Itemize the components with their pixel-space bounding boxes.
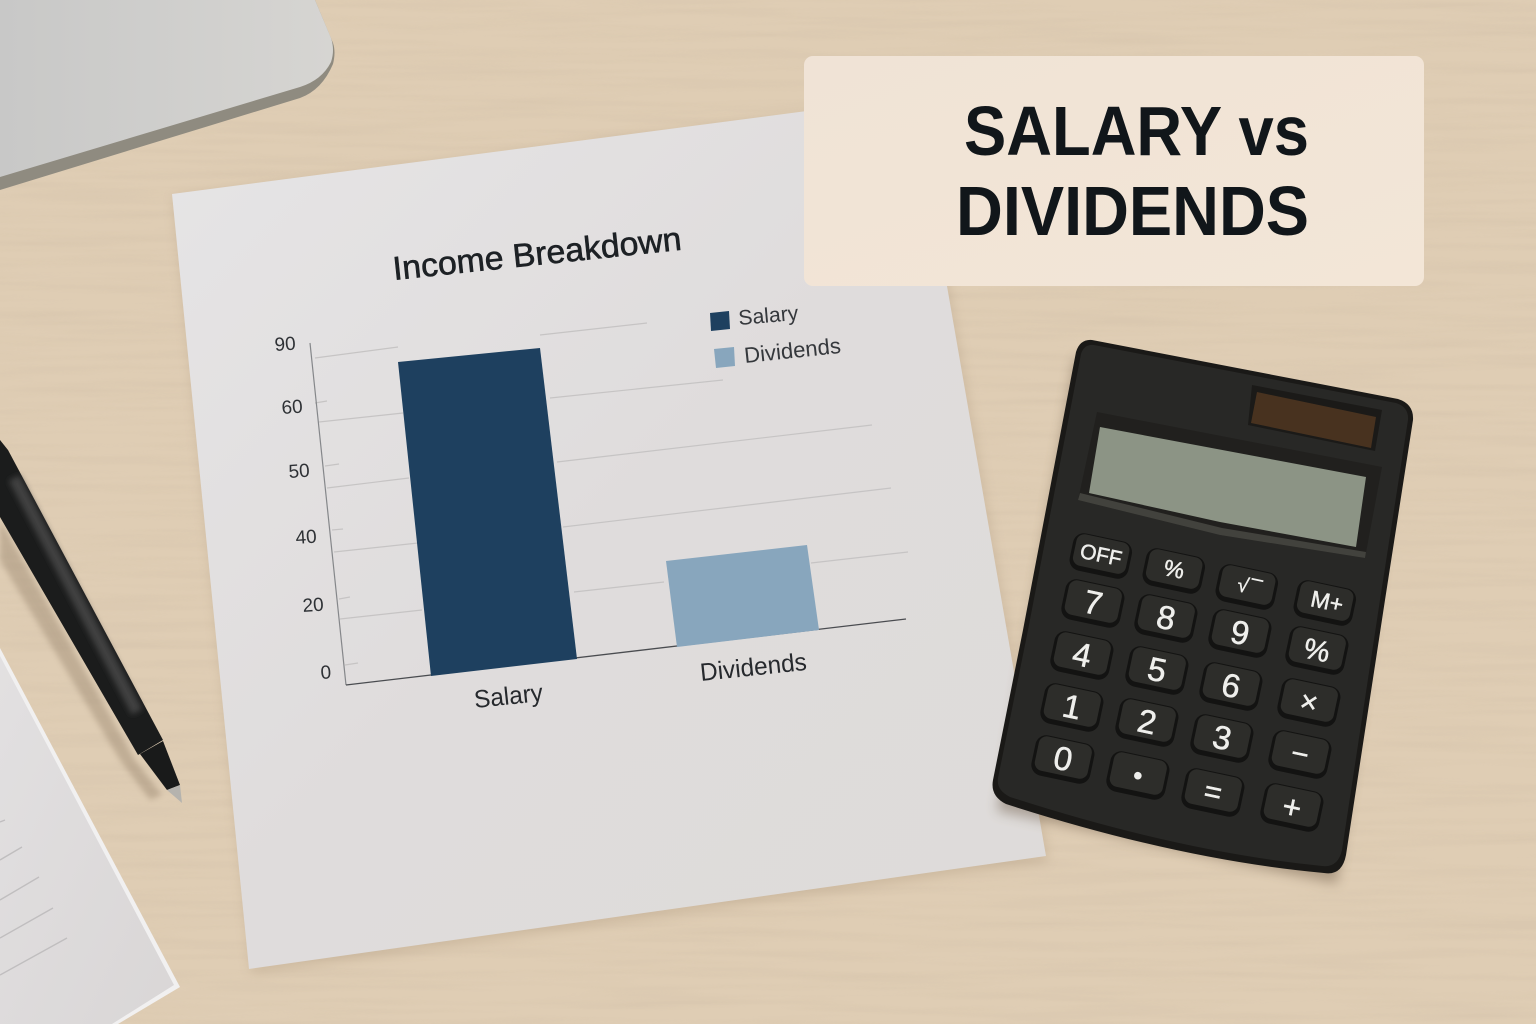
solar panel	[1248, 385, 1382, 451]
x axis labels	[473, 648, 808, 714]
pen	[0, 440, 182, 803]
chart axes	[310, 343, 906, 685]
key: 0	[1029, 733, 1097, 786]
key: equals	[1179, 766, 1247, 819]
y axis labels: 60	[281, 397, 303, 419]
legend	[710, 302, 842, 368]
key: percent large: %	[1301, 633, 1333, 669]
chart gridlines	[315, 323, 908, 665]
pen shadow	[0, 520, 162, 800]
laptop corner	[0, 0, 334, 190]
key: 2	[1113, 696, 1181, 749]
display	[1078, 412, 1382, 558]
key: 8: 8	[1153, 598, 1179, 638]
y axis labels: 20	[302, 595, 324, 617]
y axis labels: 50	[288, 461, 310, 483]
title banner: SALARY vs	[964, 92, 1309, 170]
key: 6: 6	[1218, 666, 1244, 706]
y axis labels: 40	[295, 527, 317, 549]
key: 7: 7	[1080, 583, 1106, 623]
calculator shadow	[997, 358, 1402, 884]
key: 8	[1132, 592, 1200, 645]
salary bar	[398, 348, 577, 676]
key: percent: %	[1162, 554, 1187, 584]
key: M plus: M+	[1309, 585, 1346, 618]
key: 1: 1	[1059, 687, 1085, 727]
key: 5	[1123, 644, 1191, 697]
key: 0: 0	[1050, 739, 1076, 779]
key: 3	[1188, 712, 1256, 765]
legend: Salary	[737, 302, 800, 330]
key: OFF	[1067, 531, 1134, 581]
key: multiply	[1275, 676, 1343, 729]
key: 2: 2	[1134, 702, 1160, 742]
key: plus	[1258, 781, 1326, 834]
legend: Dividends	[743, 333, 842, 368]
paper shadow	[174, 100, 1048, 973]
key: M plus	[1291, 578, 1358, 628]
y axis labels: 90	[274, 334, 296, 356]
key: percent large	[1283, 624, 1351, 677]
key: 9	[1206, 607, 1274, 660]
y axis labels	[274, 334, 332, 684]
calculator	[993, 340, 1413, 873]
key: 5: 5	[1144, 650, 1170, 690]
paper sheet with chart	[172, 97, 1046, 969]
notepad corner	[0, 648, 180, 1024]
key: minus	[1266, 728, 1334, 781]
key: 1	[1038, 681, 1106, 734]
key: decimal point	[1104, 749, 1172, 802]
key: OFF: OFF	[1078, 540, 1124, 571]
key: equals: =	[1201, 775, 1225, 810]
key: 4	[1048, 629, 1116, 682]
x axis labels: Dividends	[699, 648, 808, 687]
key: decimal point: •	[1130, 759, 1146, 792]
key: 6	[1197, 660, 1265, 713]
x axis labels: Salary	[473, 679, 545, 714]
y axis labels: 0	[320, 662, 332, 684]
key: 3: 3	[1209, 718, 1235, 758]
chart title: Income Breakdown	[391, 220, 683, 287]
key: 4: 4	[1069, 635, 1095, 675]
key: square root	[1213, 562, 1280, 612]
key: 9: 9	[1227, 613, 1253, 653]
key: percent	[1140, 546, 1207, 596]
key: plus: +	[1279, 787, 1305, 827]
key: square root: √	[1235, 574, 1251, 598]
dividends bar	[666, 545, 819, 647]
key: 7	[1059, 577, 1127, 630]
title banner: DIVIDENDS	[956, 172, 1309, 250]
key: minus: −	[1288, 737, 1312, 772]
key: multiply: ×	[1297, 685, 1321, 720]
keypad	[1029, 531, 1358, 834]
title banner	[804, 56, 1424, 286]
